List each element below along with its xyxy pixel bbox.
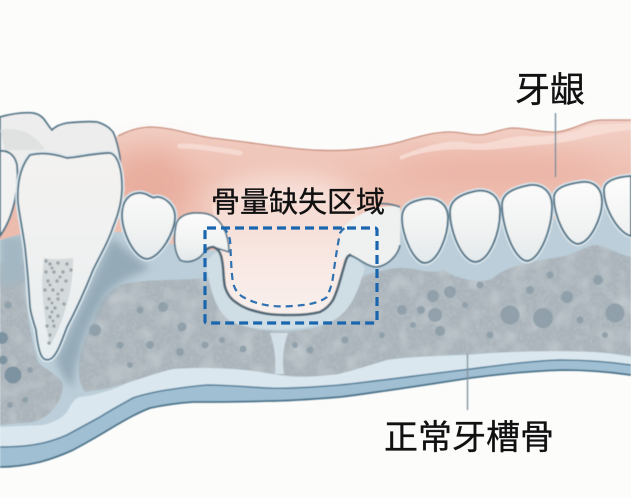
cortical bone layer [0,350,631,447]
large pores at left edge [0,332,22,384]
tooth right of defect [338,206,400,267]
back molar crown [0,113,122,200]
darker tissue beside root [56,238,150,388]
label: normal alveolar bone: 正常牙槽骨 [384,419,554,457]
gum shade left [110,150,190,220]
gingiva band under teeth [0,205,631,447]
gum shade right [390,154,610,186]
gum tissue [0,120,631,262]
defect bone contour (solid) [205,247,350,315]
root stipple [42,258,73,346]
spongy bone [0,240,631,430]
label: gum: 牙龈 [515,71,585,110]
illustration [0,113,631,467]
defect cavity [212,205,360,315]
pink gum behind left tooth [0,195,28,240]
outer blue bone border [0,360,631,467]
premolar left of defect [175,213,229,262]
leader line: gum [554,113,556,177]
dashed defect box [205,228,377,323]
vertical bone channel [270,333,288,374]
main molar with root [18,153,122,360]
bone marrow pores [4,272,624,408]
tissue at left edge [0,236,26,285]
original bone level (dashed) [223,227,347,306]
leader line: alveolar bone [466,354,468,410]
tooth right of defect outline [350,204,400,267]
gum light near defect [210,175,360,235]
left partial tooth [0,151,17,236]
label: bone defect area: 骨量缺失区域 [211,186,385,219]
defect halo [205,250,365,330]
crown shadow [0,129,45,150]
tooth halo [122,176,631,263]
teeth row [122,176,631,263]
